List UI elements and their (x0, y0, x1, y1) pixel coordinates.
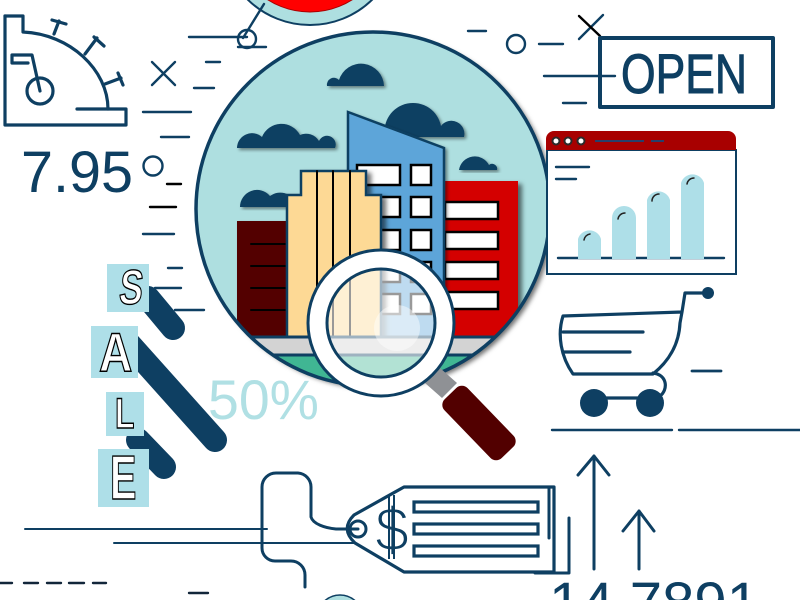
tag body (347, 487, 554, 572)
lens (327, 269, 435, 377)
icon: gauge (5, 16, 126, 125)
handle neck (425, 368, 457, 398)
decorative marks left (143, 62, 220, 310)
arrow: short (623, 511, 654, 569)
tile S (107, 261, 149, 315)
building: dark red (237, 221, 289, 339)
tile A: A (99, 321, 132, 383)
icon: bottom partial circle (317, 595, 363, 600)
text: 50%: 50% (208, 368, 319, 431)
sale diagonal bars (130, 298, 215, 467)
building: blue (348, 112, 444, 338)
tag rows (414, 502, 538, 556)
tile E: E (110, 444, 136, 513)
building: red (444, 181, 518, 339)
dashed line bottom left (0, 583, 208, 593)
ground (252, 336, 494, 380)
SALE letter tiles (91, 261, 149, 513)
building: peach tower (287, 171, 381, 338)
lines under cart (552, 371, 800, 430)
browser window chart (546, 131, 736, 274)
tile S: S (117, 261, 146, 315)
bar highlights (584, 178, 694, 240)
icon: shopping cart (560, 287, 714, 417)
main scene circle (196, 32, 550, 395)
bars (578, 174, 704, 259)
window frame (547, 150, 736, 274)
magnifying glass (308, 250, 519, 464)
clouds (237, 64, 497, 207)
dollar sign: $ (375, 496, 409, 565)
value: 7.95: 7.95 (21, 140, 133, 205)
arrow: tall (578, 456, 609, 569)
open sign: OPEN (621, 42, 747, 105)
tile L (106, 390, 144, 438)
decorative marks top right (468, 15, 615, 103)
price tag (262, 473, 569, 587)
icon: pin circle with lines (189, 4, 266, 48)
tag string (262, 473, 358, 587)
dollar bars (389, 495, 394, 559)
lens ring (308, 250, 454, 396)
tile E (98, 444, 149, 513)
handle grip (439, 382, 519, 464)
title bar (546, 131, 736, 150)
tile L: L (115, 390, 134, 438)
long lines left of tag (25, 529, 355, 543)
icon: top partial circle (221, 0, 399, 25)
tag hole (350, 521, 366, 537)
